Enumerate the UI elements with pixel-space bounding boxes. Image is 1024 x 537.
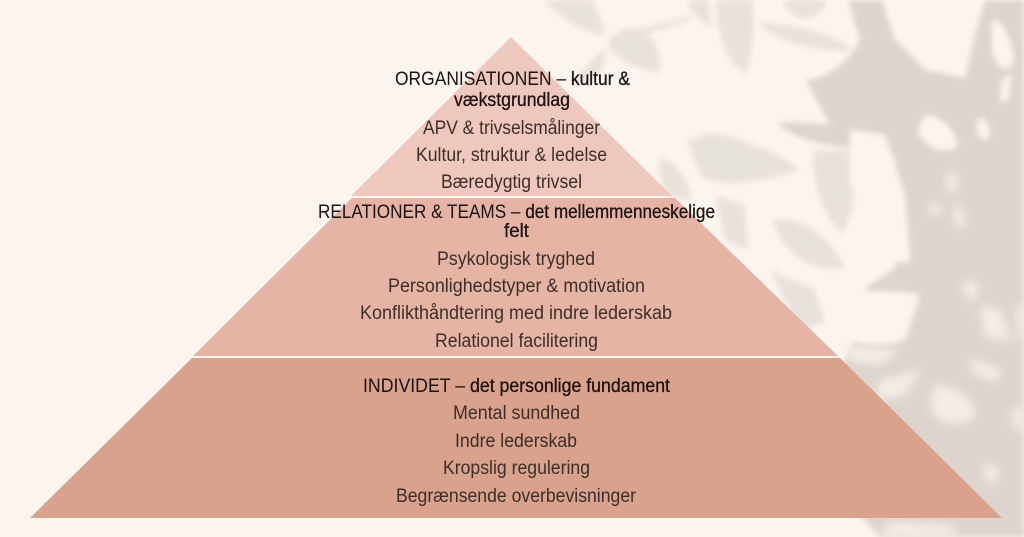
list: individet: Mental sundhed [453,403,580,424]
list: organisationen: Bæredygtig trivsel [441,172,582,193]
heading: individet: INDIVIDET – det personlige fundament [363,376,671,397]
list: relationer og teams: Psykologisk tryghed [437,249,595,270]
list: individet: Kropslig regulering [443,458,590,479]
heading: organisationen: vækstgrundlag [454,90,570,111]
list: individet: Indre lederskab [455,431,577,452]
list: relationer og teams [360,249,672,352]
tier text: relationer og teams [318,202,715,352]
foliage shadow [545,0,1024,537]
list: relationer og teams: Konflikthåndtering med indre lederskab [360,303,672,324]
heading: relationer og teams: felt [504,221,530,242]
pyramid tier: organisationen [351,37,672,196]
pyramid tier: relationer og teams [193,198,838,356]
list: individet [396,403,637,507]
list: relationer og teams: Relationel facilitering [435,331,598,352]
heading: relationer og teams: RELATIONER & TEAMS – det mellemmenneskelige [318,202,715,223]
list: organisationen: APV & trivselsmålinger [423,118,601,139]
pyramid tier: individet [30,358,1002,518]
list: organisationen: Kultur, struktur & ledelse [416,145,607,166]
heading: organisationen: ORGANISATIONEN – kultur & [395,69,630,90]
heading: relationer og teams [318,202,715,242]
tier text: organisationen [395,69,630,193]
tier text: individet [363,376,671,507]
list: organisationen [416,118,607,193]
list: individet: Begrænsende overbevisninger [396,486,637,507]
list: relationer og teams: Personlighedstyper & motivation [388,276,645,297]
heading: organisationen [395,69,630,111]
